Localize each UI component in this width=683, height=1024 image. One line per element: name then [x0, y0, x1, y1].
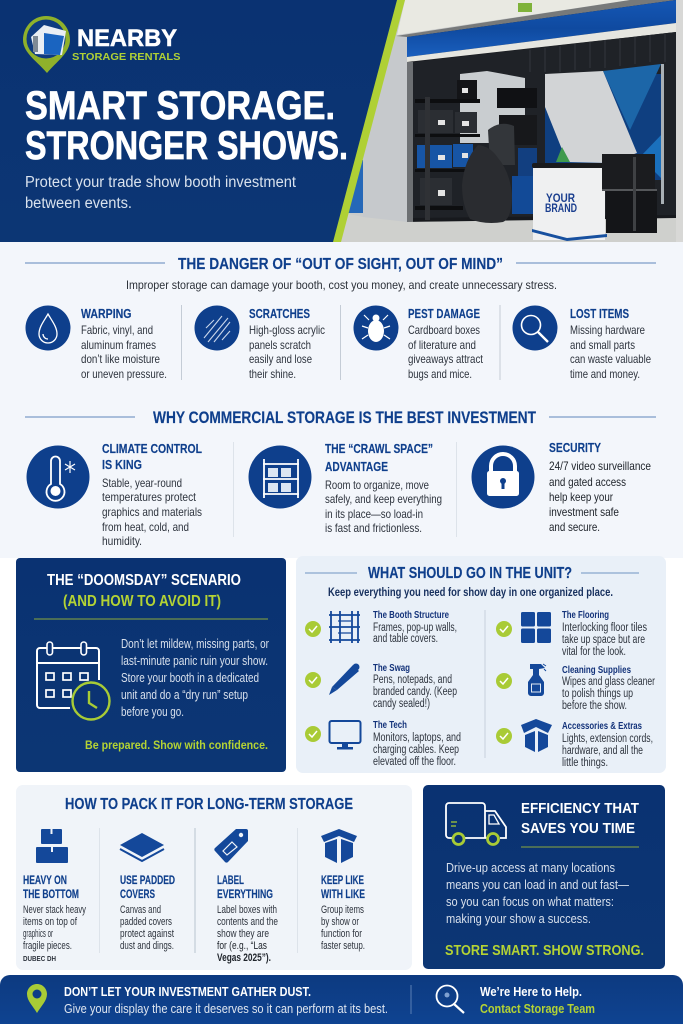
- item: keep like with like: [321, 873, 365, 952]
- item: label everything: Vegas 2025”).: [217, 952, 271, 964]
- item: crawl space: THE “CRAWL SPACE”: [325, 441, 433, 456]
- item: flooring: [562, 609, 647, 658]
- panel tagline: STORE SMART. SHOW STRONG.: [445, 943, 644, 959]
- shelf and storage bins: [415, 80, 480, 220]
- item: pest damage: giveaways attract: [408, 352, 484, 366]
- item: accessories: [562, 720, 653, 769]
- panel body text: before you go.: [121, 705, 184, 719]
- item: scratches: High-gloss acrylic: [249, 323, 325, 337]
- panel body text: [121, 637, 269, 719]
- panel body text: [446, 861, 629, 926]
- item: warping: Fabric, vinyl, and: [81, 323, 153, 337]
- item: keep like with like: WITH LIKE: [321, 887, 365, 901]
- panel body text: means you can load in and out fast—: [446, 878, 629, 892]
- item: pest damage: Cardboard boxes: [408, 323, 480, 337]
- item: flooring: vital for the look.: [562, 646, 626, 658]
- item: heavy on the bottom: fragile pieces.: [23, 940, 72, 952]
- item: keep like with like: KEEP LIKE: [321, 873, 364, 887]
- item: swag: The Swag: [373, 662, 410, 674]
- item: keep like with like: function for: [321, 928, 362, 940]
- icon: padded covers: [120, 833, 164, 861]
- panel body text: unit and do a “dry run” setup: [121, 688, 248, 702]
- panel body text: so you can focus on what matters:: [446, 895, 614, 909]
- item: lost items: and small parts: [570, 338, 635, 352]
- hero title: SMART STORAGE.: [25, 84, 335, 128]
- section heading: WHY COMMERCIAL STORAGE IS THE BEST INVESTMENT: [153, 409, 536, 427]
- item: heavy on the bottom: DUBEC DH: [23, 954, 56, 963]
- icon: monitor: [330, 721, 360, 750]
- item: label everything: [217, 873, 278, 964]
- booth backdrop: [545, 64, 664, 204]
- hero subtitle: between events.: [25, 195, 132, 212]
- section heading: THE DANGER OF “OUT OF SIGHT, OUT OF MIND”: [178, 256, 503, 273]
- item: label everything: EVERYTHING: [217, 887, 273, 901]
- item: climate control: [102, 441, 202, 548]
- item: booth structure: The Booth Structure: [373, 609, 449, 621]
- panel title: THE “DOOMSDAY” SCENARIO: [47, 572, 241, 589]
- panel background: [16, 558, 286, 772]
- item: heavy on the bottom: [23, 873, 86, 963]
- hero subtitle: Protect your trade show booth investment: [25, 174, 297, 191]
- item: security: help keep your: [549, 490, 613, 504]
- item: tech: Monitors, laptops, and: [373, 732, 461, 744]
- item: climate control: CLIMATE CONTROL: [102, 441, 202, 456]
- icon: shelving: [248, 446, 312, 508]
- branded counter: [532, 163, 607, 241]
- hero subtitle: [25, 174, 297, 212]
- panel: efficiency: [423, 785, 665, 969]
- hero photo: storage unit with booth: [335, 0, 683, 242]
- item: flooring: take up space but are: [562, 634, 645, 646]
- panel tagline: Be prepared. Show with confidence.: [85, 738, 268, 752]
- item: warping: or uneven pressure.: [81, 367, 167, 381]
- icon: padlock: [472, 446, 534, 508]
- item: label everything: Label boxes with: [217, 904, 277, 916]
- item: crawl space: is fast and frictionless.: [325, 521, 422, 535]
- panel title: SAVES YOU TIME: [521, 820, 635, 837]
- icon: booth frame: [329, 611, 360, 643]
- item: scratches: [249, 307, 325, 381]
- logo wordmark: NEARBY: [77, 25, 177, 52]
- panel title: [521, 800, 639, 837]
- item: use padded covers: Canvas and: [120, 904, 161, 916]
- item: crawl space: in its place—so load-in: [325, 507, 423, 521]
- panel: doomsday scenario: [16, 558, 286, 772]
- icon: closed box: [321, 829, 357, 863]
- item: heavy on the bottom: THE BOTTOM: [23, 887, 79, 901]
- icon: magnifier: [512, 306, 558, 350]
- light section background: [0, 242, 683, 558]
- item: climate control: IS KING: [102, 457, 142, 472]
- item: heavy on the bottom: graphics or: [23, 928, 53, 940]
- item: cleaning supplies: [562, 664, 655, 712]
- item: crawl space: ADVANTAGE: [325, 459, 388, 474]
- item: lost items: Missing hardware: [570, 323, 645, 337]
- icon: pen: [329, 664, 360, 695]
- item: label everything: for (e.g., “Las: [217, 940, 267, 952]
- panel heading: WHAT SHOULD GO IN THE UNIT?: [368, 565, 572, 582]
- item: pest damage: of literature and: [408, 338, 476, 352]
- item: label everything: contents and the: [217, 916, 278, 928]
- panel body text: Store your booth in a dedicated: [121, 671, 259, 685]
- white panel at back: [460, 71, 525, 143]
- item: flooring: The Flooring: [562, 609, 609, 621]
- footer message: Give your display the care it deserves so it can perform at its best.: [64, 1001, 388, 1016]
- icon: water drop: [26, 306, 70, 350]
- footer message: DON’T LET YOUR INVESTMENT GATHER DUST.: [64, 984, 311, 999]
- black crates stack: [497, 88, 537, 214]
- section intro: Improper storage can damage your booth, cost you money, and create unnecessary stress.: [126, 278, 557, 292]
- item: security: and gated access: [549, 475, 626, 489]
- icon: calendar with clock: [37, 642, 110, 720]
- green diagonal stripe: [333, 0, 405, 242]
- item: tech: charging cables. Keep: [373, 744, 459, 756]
- item: crawl space: [325, 441, 442, 535]
- item: heavy on the bottom: Never stack heavy: [23, 904, 86, 916]
- logo: [23, 16, 180, 73]
- item: accessories: hardware, and all the: [562, 745, 643, 757]
- item: heavy on the bottom: HEAVY ON: [23, 873, 67, 887]
- panel background: [423, 785, 665, 969]
- footer contact: We’re Here to Help.: [480, 984, 582, 999]
- item: swag: candy sealed!): [373, 698, 430, 710]
- hero title: [25, 84, 348, 168]
- footer message: [64, 984, 388, 1016]
- black road cases: [602, 154, 657, 233]
- icon: floor tiles: [521, 612, 551, 643]
- logo tagline: STORAGE RENTALS: [72, 51, 180, 63]
- item: lost items: time and money.: [570, 367, 640, 381]
- icon: search: [436, 986, 464, 1013]
- item: scratches: SCRATCHES: [249, 307, 310, 321]
- item: climate control: temperatures protect: [102, 490, 197, 504]
- icon: location pin: [27, 984, 47, 1013]
- item: flooring: Interlocking floor tiles: [562, 622, 647, 634]
- item: booth structure: Frames, pop-up walls,: [373, 622, 457, 634]
- item: security: 24/7 video surveillance: [549, 459, 651, 473]
- item: booth structure: [373, 609, 457, 645]
- hero navy panel edge: [0, 0, 403, 242]
- item: scratches: easily and lose: [249, 352, 312, 366]
- item: security: [549, 440, 651, 534]
- item: climate control: humidity.: [102, 534, 142, 548]
- item: accessories: Lights, extension cords,: [562, 733, 653, 745]
- icon: open box: [521, 719, 552, 752]
- panel title: EFFICIENCY THAT: [521, 800, 639, 817]
- item: tech: [373, 719, 461, 768]
- item: accessories: Accessories & Extras: [562, 720, 642, 732]
- hero navy background: [0, 0, 683, 242]
- icon: thermometer: [26, 446, 90, 508]
- footer background: [0, 975, 683, 1024]
- panel heading: HOW TO PACK IT FOR LONG-TERM STORAGE: [65, 796, 353, 813]
- item: swag: [373, 662, 457, 710]
- item: cleaning supplies: Cleaning Supplies: [562, 664, 631, 676]
- item: booth structure: and table covers.: [373, 633, 438, 645]
- item: heavy on the bottom: items on top of: [23, 916, 78, 928]
- footer contact: Contact Storage Team: [480, 1001, 595, 1016]
- footer bar: [0, 975, 683, 1024]
- item: warping: [81, 307, 167, 381]
- item: accessories: little things.: [562, 757, 608, 769]
- section: why commercial storage: [25, 409, 656, 548]
- panel title: [47, 572, 241, 610]
- section: the danger of out of sight: [25, 256, 656, 381]
- footer contact: [480, 984, 595, 1016]
- item: crawl space: safely, and keep everything: [325, 492, 442, 506]
- icon: spray bottle: [528, 664, 546, 696]
- item: tech: The Tech: [373, 719, 407, 731]
- item: warping: don’t like moisture: [81, 352, 160, 366]
- item: use padded covers: USE PADDED: [120, 873, 175, 887]
- item: pest damage: [408, 307, 484, 381]
- icon: stacked boxes: [36, 829, 68, 863]
- panel title: (AND HOW TO AVOID IT): [63, 593, 221, 610]
- item: scratches: panels scratch: [249, 338, 311, 352]
- hero banner: [0, 0, 683, 242]
- item: warping: aluminum frames: [81, 338, 156, 352]
- item: lost items: [570, 307, 651, 381]
- item: use padded covers: [120, 873, 175, 952]
- item: scratches: their shine.: [249, 367, 296, 381]
- item: use padded covers: dust and dings.: [120, 940, 174, 952]
- item: security: and secure.: [549, 520, 600, 534]
- item: tech: elevated off the floor.: [373, 756, 456, 768]
- branded counter: BRAND: [545, 203, 577, 215]
- icon: tag: [214, 829, 248, 863]
- checkmarks: [305, 621, 512, 744]
- item: climate control: from heat, cold, and: [102, 520, 189, 534]
- item: security: investment safe: [549, 505, 619, 519]
- item: label everything: show they are: [217, 928, 269, 940]
- panel background: [296, 556, 666, 773]
- item: lost items: LOST ITEMS: [570, 307, 629, 321]
- item: pest damage: bugs and mice.: [408, 367, 472, 381]
- item: cleaning supplies: to polish things up: [562, 688, 633, 700]
- item: swag: branded candy. (Keep: [373, 686, 457, 698]
- item: use padded covers: COVERS: [120, 887, 155, 901]
- item: cleaning supplies: before the show.: [562, 700, 627, 712]
- panel body text: last-minute panic ruin your show.: [121, 654, 268, 668]
- item: security: SECURITY: [549, 440, 601, 455]
- item: keep like with like: Group items: [321, 904, 364, 916]
- item: pest damage: PEST DAMAGE: [408, 307, 480, 321]
- icon: truck: [446, 803, 506, 844]
- branded counter: YOUR: [546, 193, 576, 205]
- item: crawl space: Room to organize, move: [325, 478, 429, 492]
- icon: bug: [354, 306, 398, 350]
- item: swag: Pens, notepads, and: [373, 674, 452, 686]
- logo pin: [23, 16, 70, 73]
- item: keep like with like: by show or: [321, 916, 359, 928]
- panel: what should go in the unit: [296, 556, 666, 773]
- item: use padded covers: protect against: [120, 928, 174, 940]
- item: climate control: graphics and materials: [102, 505, 202, 519]
- rolling cases: [462, 124, 515, 223]
- panel body text: Drive-up access at many locations: [446, 861, 615, 875]
- icon: scratches: [194, 306, 240, 350]
- item: lost items: can waste valuable: [570, 352, 651, 366]
- panel body text: Don’t let mildew, missing parts, or: [121, 637, 269, 651]
- panel: how to pack it: [16, 785, 412, 970]
- item: warping: WARPING: [81, 307, 132, 321]
- item: label everything: LABEL: [217, 873, 244, 887]
- panel background: [16, 785, 412, 970]
- panel intro: Keep everything you need for show day in one organized place.: [328, 587, 613, 599]
- hero title: STRONGER SHOWS.: [25, 124, 348, 168]
- panel body text: making your show a success.: [446, 912, 591, 926]
- item: climate control: Stable, year-round: [102, 476, 182, 490]
- item: use padded covers: padded covers: [120, 916, 172, 928]
- item: keep like with like: faster setup.: [321, 940, 365, 952]
